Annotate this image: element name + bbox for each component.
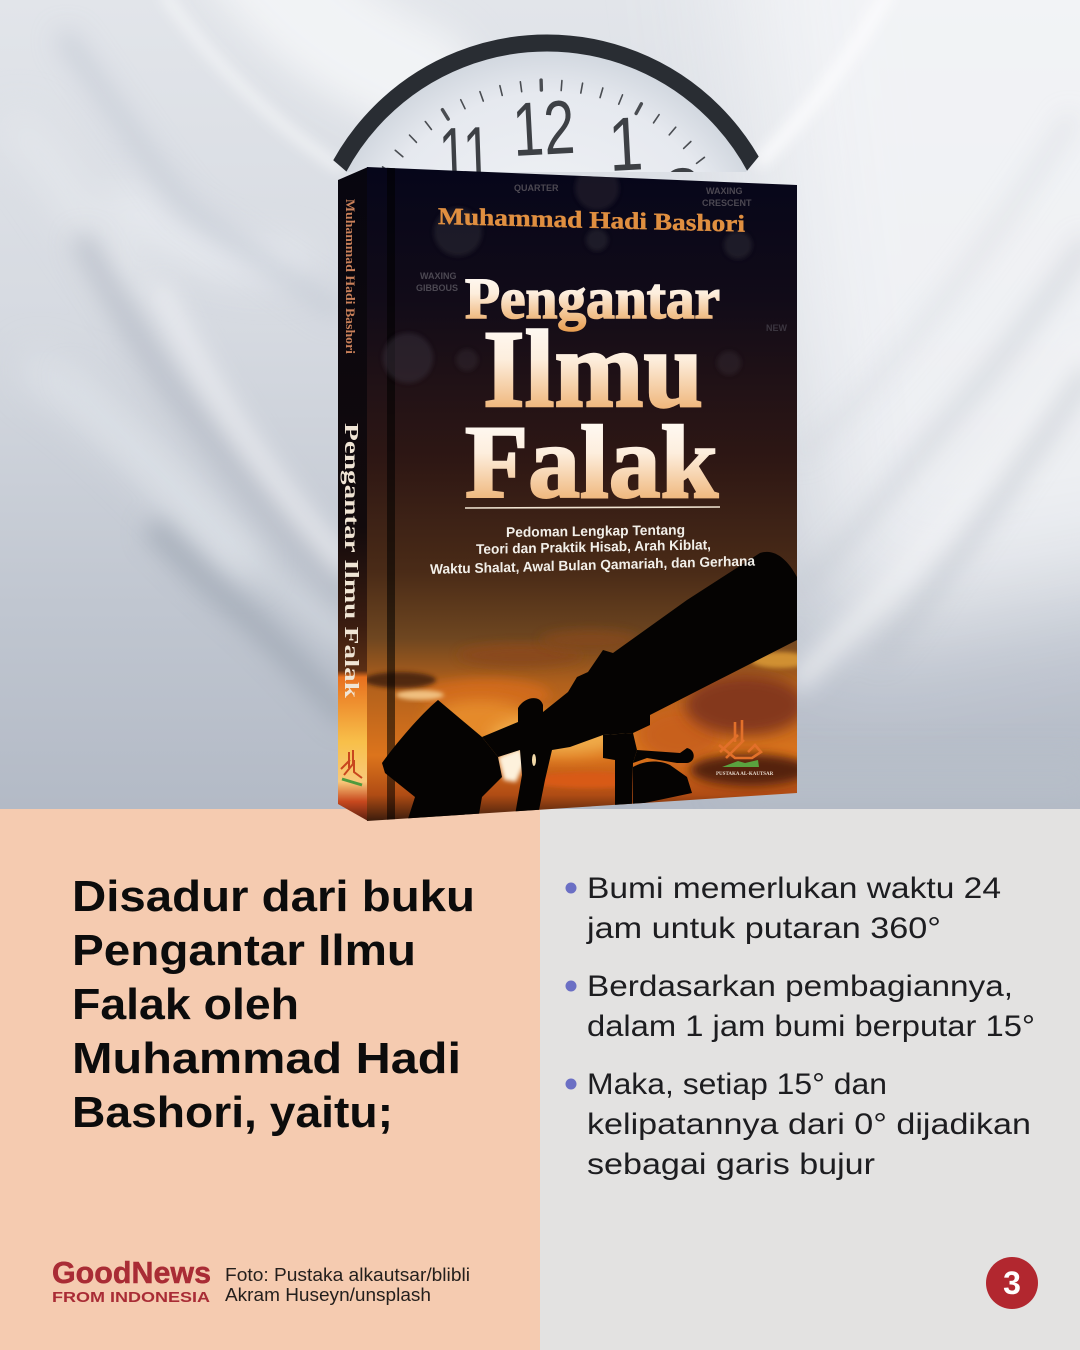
panel: right grey (540, 809, 1080, 1350)
bullet 1 (566, 872, 1001, 945)
clock numerals: 1 (606, 101, 645, 188)
book title: Falak (465, 405, 718, 520)
book title (465, 266, 720, 520)
panel: left peach (0, 809, 540, 1350)
clock rim (333, 34, 759, 172)
photo background: white curtain (0, 0, 1080, 809)
publisher logo: PUSTAKA AL-KAUTSAR (716, 772, 774, 777)
spine logo (341, 750, 362, 785)
clock ticks (382, 78, 706, 168)
clock numerals (443, 100, 694, 172)
book spine (338, 167, 368, 821)
page number badge: 3 (1003, 1265, 1021, 1301)
hinge groove (387, 167, 395, 821)
heading: Disadur dari buku (72, 872, 475, 921)
sunset clouds (364, 630, 810, 788)
bullet 1: Bumi memerlukan waktu 24 (587, 872, 1001, 905)
bullet list (566, 872, 1035, 1181)
book cover (364, 166, 810, 822)
spine author: Muhammad Hadi Bashori (343, 199, 358, 354)
logo: GoodNews from Indonesia: GoodNews (52, 1255, 211, 1290)
bullet 3: Maka, setiap 15° dan (587, 1068, 887, 1101)
clock (333, 34, 759, 172)
photo credit: Foto: Pustaka alkautsar/blibli (225, 1265, 470, 1285)
book title: Pengantar (465, 266, 720, 331)
spine title: Pengantar Ilmu Falak (340, 423, 362, 699)
logo: GoodNews from Indonesia (52, 1255, 211, 1306)
bullet 2: dalam 1 jam bumi berputar 15° (587, 1010, 1035, 1043)
clock face (346, 52, 747, 172)
telescope silhouette (382, 552, 797, 822)
bullet 3: kelipatannya dari 0° dijadikan (587, 1108, 1031, 1141)
clock numerals: 11 (438, 111, 493, 198)
logo: GoodNews from Indonesia: FROM INDONESIA (52, 1289, 210, 1306)
bullet 2 (566, 970, 1035, 1043)
heading (72, 872, 475, 1137)
bullet 3: sebagai garis bujur (587, 1148, 875, 1181)
faint phase labels (416, 183, 788, 333)
faint phase labels: NEW (766, 323, 788, 333)
faint phase labels: WAXING (706, 186, 743, 196)
book subtitle (430, 521, 755, 577)
bullet 1: jam untuk putaran 360° (586, 912, 941, 945)
publisher logo (716, 720, 774, 777)
bullet 3 (566, 1068, 1031, 1181)
heading: Muhammad Hadi (72, 1034, 461, 1083)
book subtitle: Teori dan Praktik Hisab, Arah Kiblat, (476, 536, 711, 557)
page number badge (986, 1257, 1038, 1309)
book subtitle: Pedoman Lengkap Tentang (506, 521, 685, 540)
bullet 2: Berdasarkan pembagiannya, (587, 970, 1013, 1003)
heading: Falak oleh (72, 980, 299, 1029)
faint phase labels: WAXING (420, 271, 457, 281)
heading: Bashori, yaitu; (72, 1088, 393, 1137)
clock numerals: 2 (660, 152, 705, 239)
photo credit (225, 1265, 470, 1305)
clock numerals: 12 (510, 85, 577, 173)
book title: Ilmu (483, 308, 703, 430)
faint phase labels: QUARTER (514, 183, 559, 193)
book (338, 166, 810, 822)
heading: Pengantar Ilmu (72, 926, 416, 975)
photo credit: Akram Huseyn/unsplash (225, 1285, 431, 1305)
book author: Muhammad Hadi Bashori (438, 204, 745, 238)
title underline (465, 507, 720, 508)
faint phase labels: CRESCENT (702, 198, 752, 208)
book subtitle: Waktu Shalat, Awal Bulan Qamariah, dan Gerhana (430, 553, 755, 577)
faint moon phases (383, 166, 752, 383)
faint phase labels: GIBBOUS (416, 283, 458, 293)
